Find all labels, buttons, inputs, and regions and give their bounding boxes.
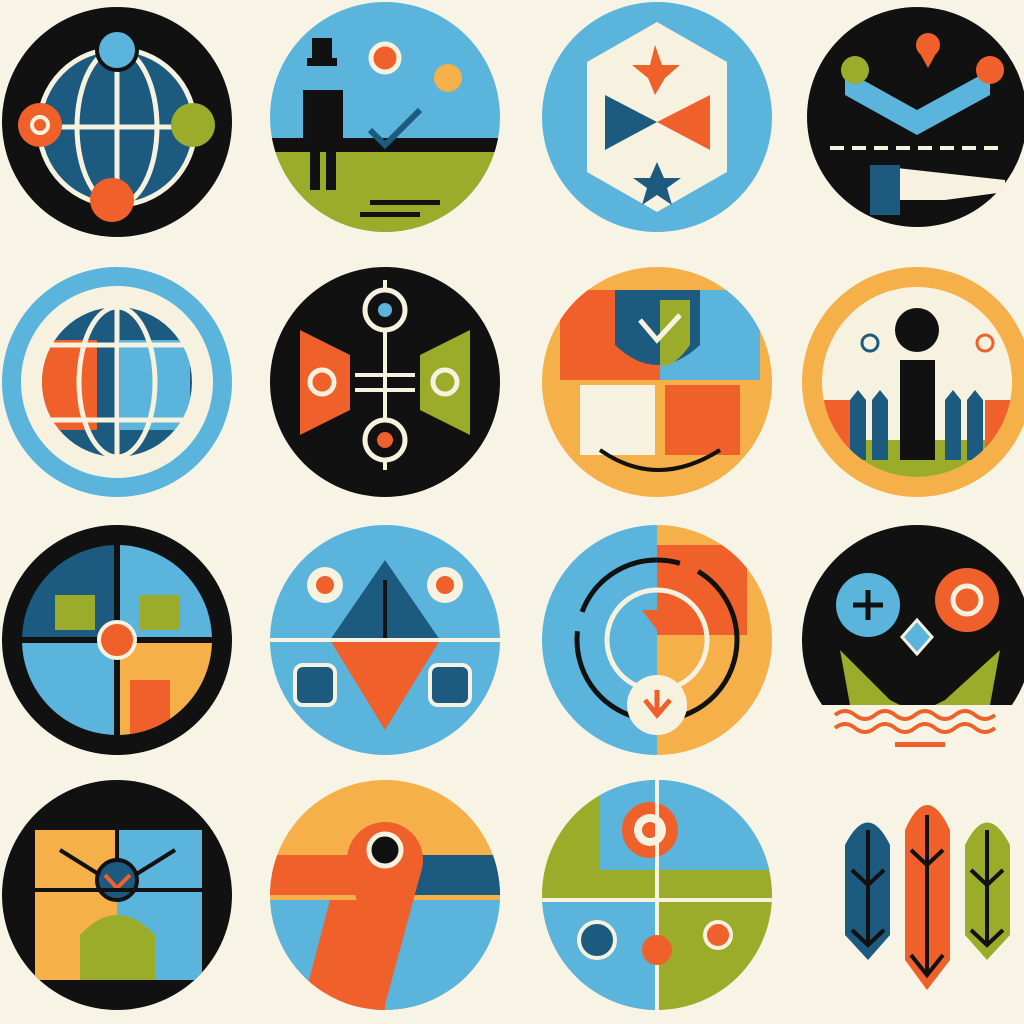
icon: quadrant globe [2, 525, 232, 755]
icon: circular arrows [540, 525, 777, 760]
icon: diamond tree [270, 525, 505, 760]
icon: black hub [270, 267, 500, 497]
icon: leaf arrows [845, 805, 1010, 990]
icon: person fence [802, 267, 1024, 500]
icon: hands holding flowers [800, 525, 1024, 747]
icon: man in field [270, 0, 500, 240]
icon: globe network [2, 7, 232, 237]
icon: target path [540, 780, 775, 1015]
icon: crossroads figure [0, 780, 235, 1015]
icon: hexagon star [542, 2, 772, 232]
icon: hand with route [807, 7, 1024, 227]
icon: shields quadrants [540, 265, 775, 500]
icon: map pin bands [270, 780, 505, 1015]
icon: ringed globe [2, 267, 232, 497]
